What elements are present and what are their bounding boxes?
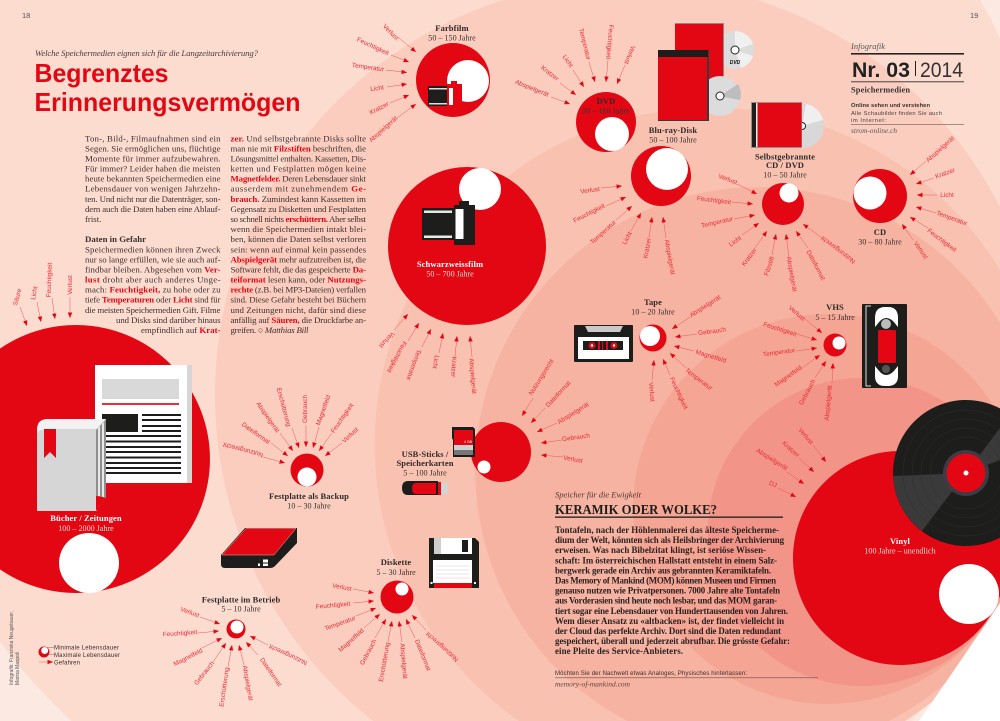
hazard: Feuchtigkeit: Feuchtigkeit [572,203,606,225]
hazard: Abspielgerät: Abspielgerät [398,643,408,679]
medium: Farbfilm: Farbfilm [435,23,469,33]
hazard: Nutzungsrecht [412,615,460,663]
hazard: Verlust: Verlust [717,173,738,186]
body text column 2: greifen. ○ Matthias Bill [230,325,309,335]
hazard: Magnetfeld: Magnetfeld [173,647,204,668]
hazard: Feuchtigkeit [316,601,374,611]
hazard: Gebrauch: Gebrauch [302,395,309,423]
hazard: Nutzungsrecht: Nutzungsrecht [222,441,264,458]
hazard: Feuchtigkeit: Feuchtigkeit [604,24,614,60]
hazard: Magnetfeld: Magnetfeld [337,627,366,654]
hazard: Erschütterung: Erschütterung [378,641,392,682]
icon: cassette tape [574,325,633,362]
hazard: Abspielgerät [785,234,798,292]
panel body text: erweisen. Was nach Bibelzitat klingt, ist seriöse Wissen- [555,545,766,555]
medium: Schwarzweissfilm [388,167,546,325]
hazard: Kratzer: Kratzer [369,100,391,116]
body text column 2: Lösungsmittel enthalten. Kassetten, Dis- [230,154,366,164]
medium: Selbstgebrannte CD / DVD: CD / DVD [766,160,804,170]
body text column 1: ten. Und nicht nur die Datenträger, son- [85,194,221,204]
legend: Maximale Lebensdauer [54,653,120,659]
body text column 1: Daten in Gefahr [85,234,146,244]
body text column 1 [85,133,221,335]
icon: Blu-ray case and disc [658,50,741,121]
panel body text: genauso nutzen wie Privatpersonen. 7000 Jahre alte Tontafeln [555,586,780,596]
hazard: Dateiformat: Dateiformat [240,421,271,446]
hazard: Kratzer [741,231,767,268]
panel heading: KERAMIK ODER WOLKE? [555,503,717,518]
hazard: Abspielgerät: Abspielgerät [254,401,281,434]
hazard: Abspielgerät [239,645,254,701]
hazard: Verlust: Verlust [332,583,352,593]
medium: Schwarzweissfilm: 50 – 700 Jahre [426,270,474,278]
medium: DVD: 30 – 100 Jahre [582,106,630,116]
body text column 2: ketten und Festplatten mögen keine [230,164,366,174]
body text column 2: anfällig auf Säuren, die Druckfarbe an- [230,315,366,325]
icon: self-burned CD case and disc [751,102,824,148]
hazard: Nutzungsrecht: Nutzungsrecht [268,642,308,666]
hazard: Verlust: Verlust [796,427,815,446]
hazard: Feuchtigkeit [163,629,219,638]
hazard: Temperatur: Temperatur [351,62,385,74]
hazard: Filzstift: Filzstift [763,255,776,277]
hazard: Kratzer: Kratzer [781,440,801,460]
hazard: Säure: Säure [12,288,23,306]
body text column 2: wenn die Speichermedien intakt blei- [230,224,366,234]
hazards: Bücher [12,262,74,326]
hazard: Abspielgerät [398,621,408,679]
panel body text: gespeichert, überall und jederzeit abrufbar. Die grösste Gefahr: [555,636,790,646]
medium: USB-Sticks / Speicherkarten: 5 – 100 Jahre [403,468,447,478]
hazard: Erschütterung: Erschütterung [275,387,292,428]
hazard: Abspielgerät: Abspielgerät [689,294,722,319]
hazard: Verlust: Verlust [179,606,200,619]
hazard: Temperatur [701,215,755,230]
medium: Diskette: Diskette [381,557,411,567]
medium: USB-Sticks / Speicherkarten [396,422,531,482]
hazard: Feuchtigkeit: Feuchtigkeit [330,402,355,435]
icon: floppy disk [429,538,479,588]
hazard: Gebrauch [193,643,226,687]
credit line: Infografik: Franziska Neugebauer, [9,611,15,685]
hazard: Licht: Licht [561,54,574,69]
kicker question: Welche Speichermedien eignen sich für die Langzeitarchivierung? [35,48,259,58]
body text column 2: Gegensatz zu Disketten und Festplatten [230,204,367,214]
credit line: Marina Maspoli [15,652,21,685]
body text column 1: findbar bleiben. Abgesehen vom Ver- [85,264,221,274]
medium: VHS: VHS [826,302,844,312]
medium: Bücher / Zeitungen: 100 – 2000 Jahre [58,524,114,533]
hazard: Abspielgerät: Abspielgerät [824,385,834,421]
main title: Begrenztes [34,58,168,88]
medium: Festplatte im Betrieb [202,594,280,638]
icon: VHS cassette [862,304,907,388]
medium: Vinyl [793,400,1000,665]
icon: vinyl record [893,400,1000,546]
hazard: Verlust: Verlust [580,186,600,196]
masthead block: Nr. 03 / 2014: im Internet: [851,118,886,124]
hazard: Filzstift [763,234,776,277]
hazard: Dateiformat: Dateiformat [258,657,283,688]
hazard: Feuchtigkeit: Feuchtigkeit [356,36,390,57]
body text column 2: Abspielgerät mehr aufzutreiben ist, die [230,254,366,264]
hazard: Verlust: Verlust [622,44,636,65]
medium: Selbstgebrannte CD / DVD: Selbstgebrannte [755,152,815,162]
credit line [9,611,21,685]
hazard: Verlust: Verlust [381,23,400,42]
body text column 2: rechte (z.B. bei MP3-Dateien) verfallen [230,285,367,295]
hazards: Blu-ray [572,186,676,275]
hazard: Temperatur: Temperatur [684,367,714,393]
medium: DVD [576,92,636,152]
hazard: Abspielgerät: Abspielgerät [467,358,477,394]
hazard: Kratzer: Kratzer [539,64,560,83]
icon: DVD case and disc [675,23,754,80]
hazard: Temperatur: Temperatur [577,28,592,62]
hazard: Licht [728,223,759,248]
icon: black and white film [422,201,475,245]
hazard: Nutzungsrecht: Nutzungsrecht [820,234,857,265]
hazard: Verlust: Verlust [377,330,396,349]
medium: Tape [631,297,675,352]
masthead block: Nr. 03 / 2014: Speichermedien [851,86,910,94]
hazard: Abspielgerät: Abspielgerät [663,239,676,275]
hazard: Dateiformat [246,642,283,688]
body text column 1: tiefe Temperaturen oder Licht sind für [85,295,221,305]
body text column 1: die meisten Speichermedien Gift. Filme [85,305,221,315]
hazard: Nutzungsrecht: Nutzungsrecht [528,358,556,397]
panel footer link: Möchten Sie der Nachwelt etwas Analoges, Physisches hinterlassen: [555,671,747,677]
hazard: Licht: Licht [370,84,384,93]
body text column 2: man nie mit Filzstiften beschriften, die [230,143,366,153]
hazard: Feuchtigkeit: Feuchtigkeit [668,376,689,411]
icon: USB stick [402,481,448,495]
main title: Erinnerungsvermögen [34,87,300,117]
hazards: Vinyl [755,427,826,497]
medium: Selbstgebrannte CD / DVD: 10 – 50 Jahre [763,170,807,180]
body text column 2: brauch. Zumindest kann Kassetten im [230,194,366,204]
hazard: Temperatur: Temperatur [935,210,969,228]
hazard: Erschütterung [378,621,392,682]
panel: Keramik oder Wolke [555,490,818,688]
hazard: Feuchtigkeit: Feuchtigkeit [163,629,198,638]
body text column 1: Für immer? Leider haben die meisten [85,164,221,174]
hazard: Licht: Licht [30,286,39,300]
hazard: Verlust: Verlust [647,382,656,402]
hazard: Dateiformat [796,231,826,282]
hazard: Dateiformat: Dateiformat [545,380,573,409]
hazard: Verlust: Verlust [341,426,360,445]
medium: Blu-ray-Disk [631,125,697,206]
masthead block: Nr. 03 / 2014: Nr. 03 [852,59,910,82]
hazard: Licht: Licht [940,192,954,199]
body text column 1: Ton-, Bild-, Filmaufnahmen sind ein [85,133,221,143]
hazard: Licht: Licht [431,355,440,369]
medium: Festplatte als Backup [269,454,349,510]
panel body text: Tontafeln, nach der Höhlenmalerei das älteste Speicherme- [555,525,779,535]
hazard: Verlust: Verlust [563,455,583,465]
icon: colour film [428,81,462,107]
body text column 2: zer. Und selbstgebrannte Disks sollte [230,133,366,143]
medium: Farbfilm [416,23,490,117]
hazard: Feuchtigkeit: Feuchtigkeit [926,227,958,254]
medium: CD: CD [874,227,886,237]
masthead block: Nr. 03 / 2014: Alle Schaubilder finden Sie auch [851,111,942,117]
legend: Gefahren [54,660,80,666]
medium: USB-Sticks / Speicherkarten: Speicherkarten [396,458,454,468]
hazard: Magnetfeld: Magnetfeld [773,364,804,389]
body text column 1: heute bekannten Speichermedien eine [85,174,221,184]
hazard: Erschütterung: Erschütterung [218,666,231,707]
hazard: Feuchtigkeit: Feuchtigkeit [385,340,408,374]
hazards: VHS [762,305,834,421]
body text column 1: dern auch die Daten haben eine Ablauf- [85,204,221,214]
hazard: Gebrauch: Gebrauch [562,432,591,443]
medium: Schwarzweissfilm: Schwarzweissfilm [417,259,483,269]
body text column 1: Speichermedien können ihren Zweck [85,244,221,254]
body text column 1: Segen. Sie ermöglichen uns, flüchtige [85,143,221,153]
hazard: Abspielgerät: Abspielgerät [785,256,798,292]
hazards: CD [902,135,969,261]
hazard: Nutzungsrecht [250,636,308,666]
hazard: Gebrauch: Gebrauch [698,326,727,337]
hazard: Verlust [179,606,220,624]
body text column 2: sein: wenn auf einmal kein passendes [230,244,367,254]
icon: DVD case and disc: DVD [730,60,741,66]
hazard: Feuchtigkeit: Feuchtigkeit [46,262,54,297]
hazards: Festplatte als Backup [222,387,360,463]
hazard: Kratzer: Kratzer [449,356,457,378]
body text column 2 [230,133,367,335]
panel body text [555,525,790,656]
hazard: Feuchtigkeit: Feuchtigkeit [762,321,797,338]
hazard: Licht: Licht [728,235,743,248]
medium: Vinyl: 100 Jahre – unendlich [864,546,936,556]
legend: Minimale Lebensdauer [54,646,119,652]
hazards: DVD [514,24,636,104]
masthead block: Nr. 03 / 2014: strom-online.ch [851,127,897,135]
page number 18: 18 [22,11,30,20]
panel body text: aus Vorderasien sind heute noch lesbar, und das MOM garan- [555,596,777,606]
hazard: Temperatur: Temperatur [324,615,357,633]
medium: VHS [815,302,855,356]
panel body text: Wem dieser Ansatz zu «altbacken» ist, der findet vielleicht in [555,616,784,626]
hazards: Diskette [316,583,460,682]
medium: Tape: 10 – 20 Jahre [631,308,675,316]
medium: Festplatte im Betrieb: Festplatte im Betrieb [202,594,280,604]
body text column 2: sind. Diese Gefahr besteht bei Büchern [230,295,367,305]
hazard: Gebrauch: Gebrauch [798,378,818,406]
masthead block: Nr. 03 / 2014 [850,41,964,135]
hazard: Abspielgerät: Abspielgerät [514,79,550,99]
medium: CD: 30 – 80 Jahre [858,238,902,246]
medium: Blu-ray-Disk: Blu-ray-Disk [649,125,697,135]
masthead block: Nr. 03 / 2014: Online sehen und verstehen [851,103,930,109]
body text column 2: Magnetfelder. Deren Lebensdauer sinkt [230,174,367,184]
panel body text: bergwerk gerade ein Archiv aus gebrannten Keramiktafeln. [555,565,771,575]
hazard: Temperatur: Temperatur [404,348,422,382]
body text column 2: Software fehlt, die das gespeicherte Da- [230,264,366,274]
medium: Diskette [376,557,416,614]
hazard: Feuchtigkeit [696,195,753,206]
body text column 1: Momente für immer aufzubewahren. [85,154,220,164]
hazards: Tape [647,294,727,411]
body text column 2: so schnell nichts erschüttern. Aber selbst [230,214,367,224]
body text column 1: nur so lange erfüllen, wie sie auch auf- [85,254,221,264]
hazard: Magnetfeld [173,638,222,668]
medium: Selbstgebrannte CD / DVD [755,152,815,225]
icon: external hard drive [221,528,297,568]
icon: newspaper [95,365,192,483]
medium: Diskette: 5 – 30 Jahre [376,568,416,577]
hazard: Dateiformat [406,619,432,672]
hazard: Abspielgerät: Abspielgerät [755,447,789,472]
masthead block: Nr. 03 / 2014: 2014 [920,59,963,82]
medium: DVD: DVD [597,96,615,106]
hazards: Schwarzweissfilm [377,314,477,394]
hazard: Verlust: Verlust [912,240,929,261]
hazard: Gebrauch [359,619,386,666]
hazard: Gebrauch: Gebrauch [193,660,216,687]
hazard: Abspielgerät: Abspielgerät [241,665,254,701]
panel body text: eine Pleite des Service-Anbieters. [555,646,683,656]
body text column 2: teiformat lesen kann, oder Nutzungs- [230,275,366,285]
hazard: Gebrauch: Gebrauch [359,638,379,666]
medium: Festplatte als Backup: Festplatte als Backup [269,491,349,501]
body text column 1: Lebensdauer von wenigen Jahrzehn- [85,184,221,194]
medium: Vinyl: Vinyl [890,536,911,546]
hazard: Temperatur: Temperatur [589,219,618,246]
hazard: Dateiformat: Dateiformat [413,639,432,672]
hazard: Feuchtigkeit: Feuchtigkeit [696,195,732,206]
icon: memory card [452,427,475,457]
hazard: Kratzer: Kratzer [934,167,957,181]
icon: book [37,419,106,511]
hazards: Festplatte im Betrieb [163,606,308,707]
body text column 2: ausserdem mit zunehmendem Ge- [230,184,366,194]
hazard: Verlust: Verlust [67,275,74,295]
hazard: Kratzer: Kratzer [741,246,759,268]
body text column 1: mach: Feuchtigkeit, zu hohe oder zu [85,285,221,295]
masthead block: Nr. 03 / 2014: Infografik [850,41,885,51]
hazard: Temperatur: Temperatur [763,347,796,358]
panel footer link: memory-of-mankind.com [555,680,631,688]
medium: USB-Sticks / Speicherkarten: USB-Sticks / [402,449,449,459]
hazard: DJ: DJ [768,480,778,489]
panel kicker: Speicher für die Ewigkeit [555,490,642,500]
medium: Bücher / Zeitungen [0,325,210,593]
main title [34,58,300,117]
panel body text: schaft: Im österreichischen Hallstatt entsteht in einem Salz- [555,555,777,565]
hazard: Magnetfeld: Magnetfeld [315,394,333,426]
panel body text: tiert sogar eine Lebensdauer von Hunderttausenden von Jahren. [555,606,788,616]
hazard: Nutzungsrecht: Nutzungsrecht [425,630,460,663]
page number 19: 19 [970,11,978,20]
panel body text: Das Memory of Mankind (MOM) können Museen und Firmen [555,576,776,586]
hazard: Kratzer: Kratzer [642,237,653,259]
hazard: Temperatur: Temperatur [701,215,735,230]
panel footer link [555,671,818,688]
hazard: Abspielgerät: Abspielgerät [556,401,590,426]
hazard: Erschütterung [218,645,232,707]
hazard: Verlust [332,583,374,593]
hazard: Dateiformat: Dateiformat [805,249,826,282]
hazard: Magnetfeld: Magnetfeld [695,349,727,365]
hazard: Magnetfeld [337,614,380,654]
panel body text: dium der Welt, könnten sich als Heilsbringer der Archivierung [555,535,785,545]
medium: Blu-ray-Disk: 50 – 100 Jahre [649,136,697,144]
medium: Bücher / Zeitungen: Bücher / Zeitungen [50,513,122,523]
medium: VHS: 5 – 15 Jahre [815,313,855,322]
icon: memory card: 4 GB [464,440,473,444]
hazard: Abspielgerät: Abspielgerät [368,115,399,144]
body text column 2: und Zeitungen nicht, dafür sind diese [230,305,366,315]
body text column 1: empfindlich auf Krat- [141,325,221,335]
medium: Tape: Tape [644,297,662,307]
hazard: Temperatur [324,608,376,633]
hazard: Licht: Licht [621,231,634,246]
body text column 1: frist. [85,214,101,224]
hazards: Farbfilm [351,23,416,144]
hazard: Feuchtigkeit: Feuchtigkeit [316,601,351,611]
panel body text: der Cloud das perfekte Archiv. Dort sind die Daten redundant [555,626,781,636]
hazard: Nutzungsrecht [803,224,857,265]
legend [38,646,120,666]
hazard: Abspielgerät: Abspielgerät [925,135,956,164]
medium: CD [853,169,907,246]
hazard: Verlust: Verlust [787,305,806,323]
body text column 1: und Disks sind darüber hinaus [116,315,221,325]
medium: Farbfilm: 50 – 150 Jahre [428,34,476,42]
body text column 1: lust droht aber auch anderes Unge- [85,275,221,285]
medium: Festplatte im Betrieb: 5 – 10 Jahre [221,604,261,614]
hazards: Selbstgebrannte [696,173,857,292]
hazard: Verlust [717,173,757,194]
hazards: USB [522,358,591,465]
body text column 2: ben, können die Daten selbst verloren [230,234,367,244]
medium: Festplatte als Backup: 10 – 30 Jahre [287,502,331,510]
